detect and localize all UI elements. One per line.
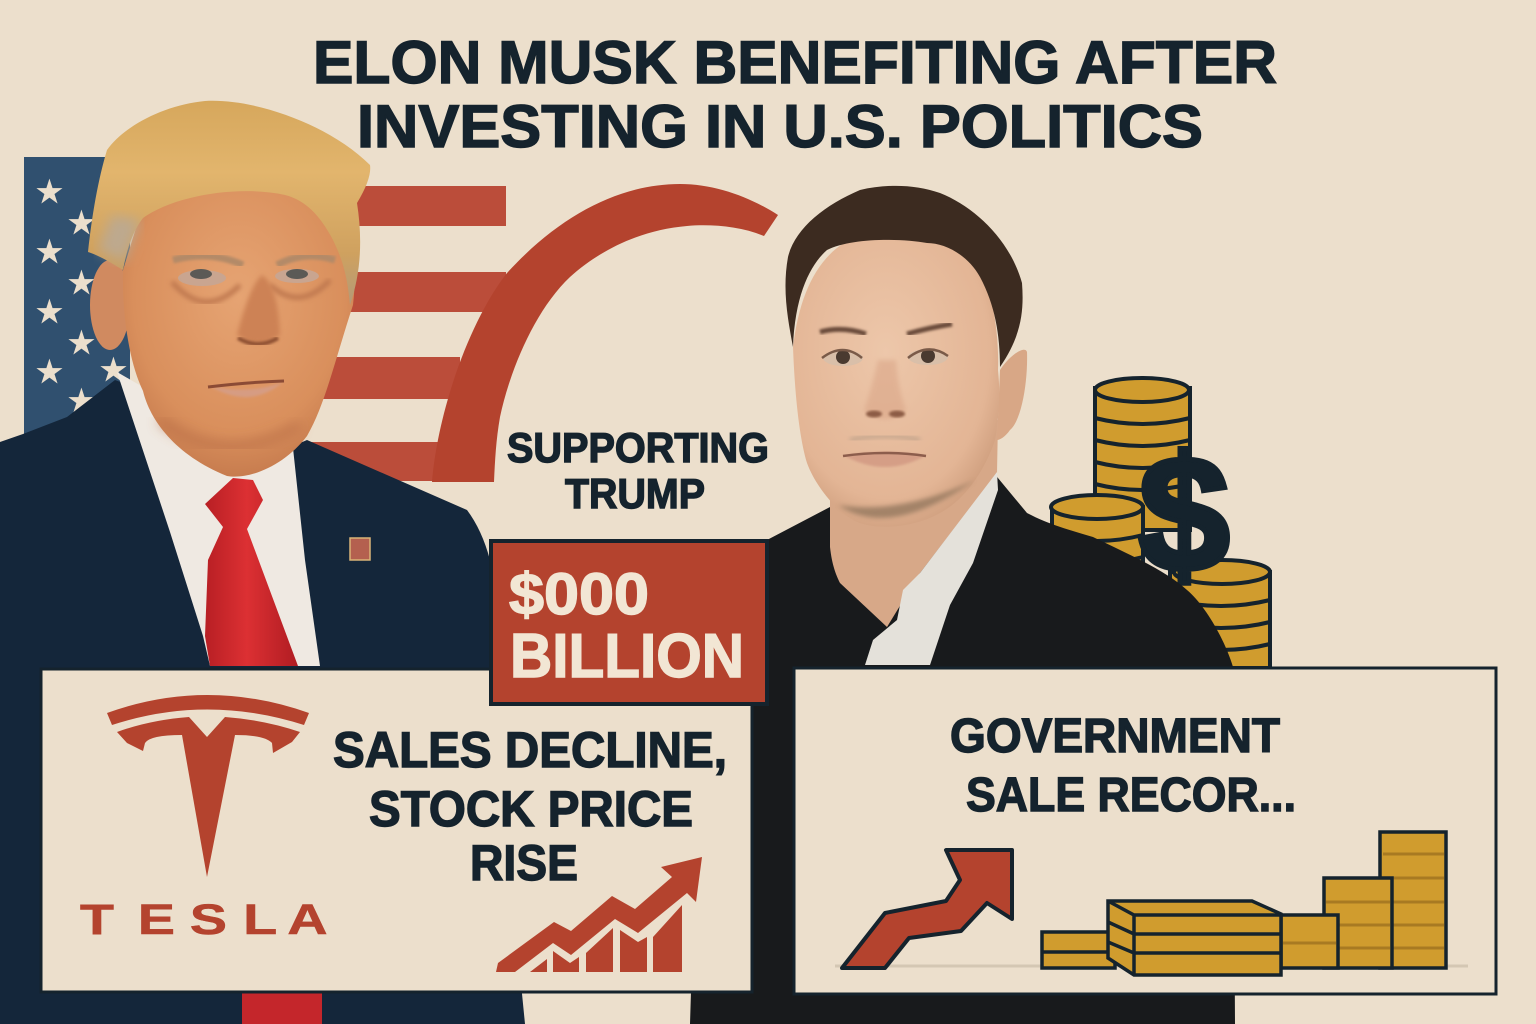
label: supporting trump: TRUMP: [565, 470, 705, 517]
callout: $000 billion: $000: [509, 562, 649, 627]
panel: sales decline, stock price rise: [41, 669, 752, 992]
american flag graphic: [24, 157, 506, 481]
hair: [785, 186, 1023, 367]
jacket: [690, 472, 1235, 1024]
american flag graphic: ★: [68, 267, 95, 300]
label: supporting trump: [507, 424, 769, 517]
panel text: [950, 710, 1296, 822]
american flag graphic: ★: [68, 207, 95, 240]
neck: [830, 420, 998, 627]
callout: $000 billion: BILLION: [510, 622, 744, 691]
icon: red arrow: [842, 850, 1012, 968]
icon: gold bars and stacks: [1042, 832, 1446, 975]
panel text: STOCK PRICE: [369, 781, 693, 837]
panel text: RISE: [470, 835, 578, 891]
title: [313, 29, 1277, 160]
american flag graphic: ★: [68, 327, 95, 360]
flag pin: [350, 538, 370, 560]
red arc: [432, 184, 778, 482]
face: [123, 174, 355, 477]
ear: [997, 350, 1027, 440]
ground line: [835, 964, 1468, 968]
american flag graphic: ★: [68, 385, 95, 418]
hair: [88, 101, 370, 305]
face: [793, 235, 999, 527]
panel text: SALE RECOR...: [966, 769, 1296, 822]
american flag graphic: ★: [36, 296, 63, 329]
american flag graphic: ★: [36, 356, 63, 389]
facial features: [160, 256, 335, 446]
ear: [90, 260, 130, 350]
suit: [0, 380, 525, 1024]
title: ELON MUSK BENEFITING AFTER: [313, 29, 1277, 96]
american flag graphic: ★: [100, 354, 127, 387]
callout: $000 billion: [491, 541, 767, 704]
coin stacks and dollar sign: [1051, 378, 1270, 668]
american flag graphic: ★: [36, 176, 63, 209]
facial features: [820, 324, 975, 518]
portrait: Donald Trump: [0, 101, 525, 1024]
panel: government sale record: [794, 668, 1496, 994]
icon: tesla logo: TESLA: [80, 895, 328, 943]
tie: [205, 478, 298, 666]
icon: rising stock chart: [496, 857, 702, 972]
panel text: SALES DECLINE,: [333, 722, 727, 778]
shirt collar: [865, 472, 998, 665]
american flag graphic: ★: [36, 236, 63, 269]
coin stacks and dollar sign: $: [1138, 422, 1230, 606]
gray temple: [98, 215, 140, 262]
label: supporting trump: SUPPORTING: [507, 424, 769, 471]
title: INVESTING IN U.S. POLITICS: [357, 93, 1203, 160]
shirt: [117, 372, 320, 666]
panel text: GOVERNMENT: [950, 710, 1280, 763]
portrait: Elon Musk: [690, 186, 1235, 1024]
icon: tesla logo: [80, 695, 328, 943]
panel text: [333, 722, 727, 891]
